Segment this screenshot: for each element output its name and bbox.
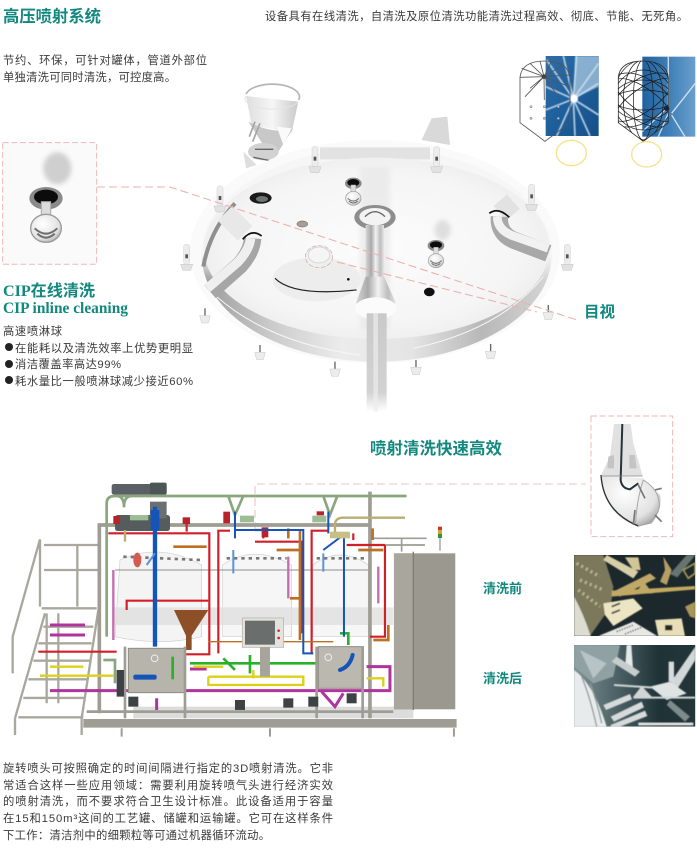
gold overhead pipe — [125, 518, 405, 542]
light green valve blocks — [130, 515, 326, 522]
small port — [297, 221, 308, 227]
photo: after cleaning — [574, 645, 695, 727]
orange pipes — [173, 528, 388, 642]
bottom description paragraph: 的喷射清洗，而不要求符合卫生设计标准。此设备适用于容量 — [3, 794, 333, 808]
red pipes — [38, 520, 385, 654]
panel: spray pattern diagrams — [520, 56, 695, 167]
highlight ring left — [556, 140, 586, 166]
callout box: spray ball detail — [3, 143, 97, 264]
magenta pipes — [50, 557, 390, 710]
leader line: CIP skid to jet head — [255, 484, 586, 530]
nozzle — [29, 187, 63, 242]
photo: before cleaning — [574, 555, 695, 636]
geared motor — [112, 483, 170, 531]
brown funnel — [174, 610, 208, 650]
skid frame — [83, 492, 457, 737]
label: after cleaning: 清洗后 — [483, 671, 522, 686]
secondary inlet cone — [422, 117, 450, 145]
lid body — [190, 140, 560, 363]
blue pipes — [137, 507, 353, 677]
centre spray ring — [354, 205, 396, 230]
dark port left — [250, 192, 272, 204]
stair and platform — [13, 539, 98, 735]
heading: fast effective jet cleaning: 喷射清洗快速高效 — [370, 438, 502, 458]
signal light — [438, 527, 442, 551]
hatch dome — [273, 246, 361, 301]
central shaft — [355, 225, 396, 412]
highlight ring right — [632, 142, 662, 167]
touch panel — [242, 618, 284, 677]
left return pipe — [207, 213, 262, 292]
intro paragraph: 单独清洗可同时清洗，可控度高。 — [3, 70, 176, 84]
title: high pressure spray system: 高压喷射系统 — [3, 6, 101, 26]
hopper — [243, 84, 299, 168]
feature list: 高速喷淋球 — [3, 324, 62, 338]
red valves — [113, 511, 324, 567]
intro paragraph: 节约、环保，可针对罐体，管道外部位 — [3, 53, 207, 67]
heading: CIP inline cleaning: CIP在线清洗 — [3, 281, 95, 300]
feature list: 消洁覆盖率高达99% — [15, 357, 121, 371]
feature list: 耗水量比一般喷淋球减少接近60% — [15, 374, 193, 388]
tanks — [113, 552, 413, 718]
diagram: static spray ball — [520, 56, 599, 141]
feature list: 在能耗以及清洗效率上优势更明显 — [15, 341, 193, 355]
bottom description paragraph: 常适合这样一些应用领域：需要利用旋转喷气头进行经济实效 — [3, 778, 333, 792]
yellow pipes — [40, 667, 383, 687]
green pipes — [103, 496, 407, 683]
intro paragraph — [3, 53, 207, 84]
diagram: rotary jet head — [618, 56, 696, 142]
top description text: 设备具有在线清洗，自清洗及原位清洗功能清洗过程高效、彻底、节能、无死角。 — [265, 9, 688, 23]
callout box: jet head — [591, 416, 673, 537]
valves lower row — [117, 670, 357, 710]
control cabinet — [394, 552, 455, 710]
bottom description paragraph — [3, 761, 333, 842]
spray nozzle right — [428, 220, 451, 268]
leader line: lid to callout — [97, 187, 577, 320]
heading: CIP inline cleaning — [3, 281, 128, 317]
bottom description paragraph: 旋转喷头可按照确定的时间间隔进行指定的3D喷射清洗。它非 — [3, 761, 333, 775]
dark port right — [424, 288, 435, 296]
pump cabinet left — [125, 647, 185, 718]
pump cabinet right — [317, 647, 363, 718]
bottom description paragraph: 下工作：清洁剂中的细颗粒等可通过机器循环流动。 — [3, 828, 270, 842]
clamps — [181, 147, 573, 376]
bottom description paragraph: 在15和150m³这间的工艺罐、储罐和运输罐。它可在这样条件 — [3, 811, 333, 825]
bright green pipes — [173, 633, 348, 678]
right return pipe — [489, 202, 548, 253]
label: before cleaning: 清洗前 — [483, 581, 522, 596]
heading: CIP inline cleaning: CIP inline cleaning — [3, 300, 128, 317]
CIP skid process diagram — [13, 483, 457, 737]
label: visual inspection: 目视 — [584, 303, 615, 321]
spray nozzle top — [345, 178, 362, 205]
feature list — [3, 324, 193, 388]
tank lid illustration — [181, 84, 573, 412]
